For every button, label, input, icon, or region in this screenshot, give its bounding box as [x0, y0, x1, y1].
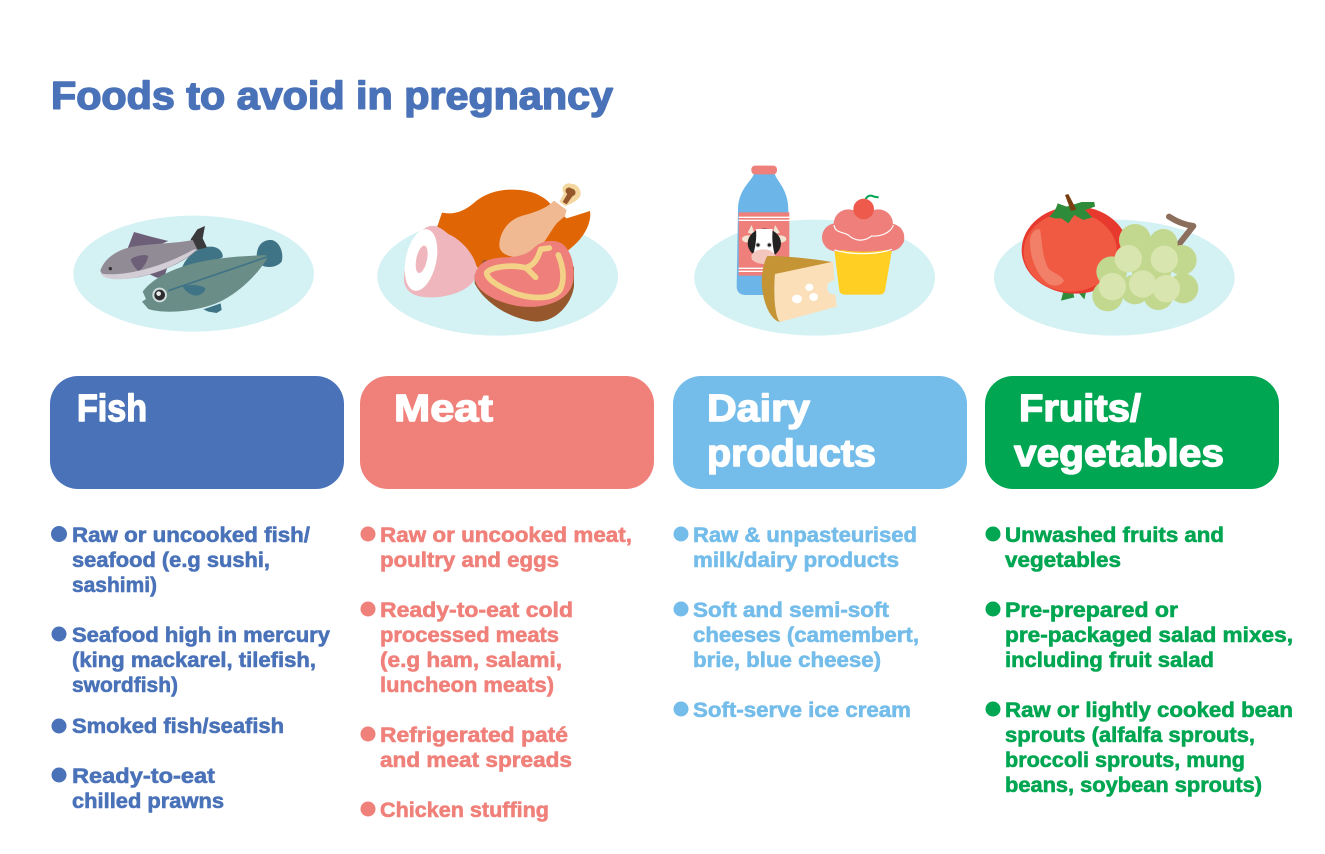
list: fruit and vegetable items: Unwashed fruits and — [1005, 524, 1224, 547]
list: fruit and vegetable items: Pre-prepared or — [1005, 599, 1178, 622]
panel: fish — [50, 216, 344, 813]
list: meat items — [360, 524, 632, 822]
list: dairy items: milk/dairy products — [693, 549, 899, 572]
list: fruit and vegetable items: sprouts (alfalfa sprouts, — [1005, 724, 1255, 747]
list: fish items: swordfish) — [72, 674, 178, 697]
list: meat items: Refrigerated paté — [380, 724, 568, 747]
list: dairy items: cheeses (camembert, — [693, 624, 919, 647]
panel: fruits and vegetables — [985, 194, 1293, 797]
list: fish items: seafood (e.g sushi, — [72, 549, 270, 572]
list: fruit and vegetable items: beans, soybean sprouts) — [1005, 774, 1262, 797]
list: fruit and vegetable items: pre-packaged salad mixes, — [1005, 624, 1293, 647]
list: dairy items: Soft-serve ice cream — [693, 699, 911, 722]
list: meat items: Chicken stuffing — [380, 799, 549, 822]
icon: milk bottle, cupcake and cheese on plate — [694, 166, 935, 336]
list: meat items: (e.g ham, salami, — [380, 649, 562, 672]
list: fish items — [51, 524, 330, 813]
list: fish items: sashimi) — [72, 574, 157, 597]
header: Meat: Meat — [394, 388, 493, 430]
list: fish items: Seafood high in mercury — [72, 624, 330, 647]
panel: meat — [360, 183, 654, 822]
list: fruit and vegetable items: including fruit salad — [1005, 649, 1214, 672]
header: Fish: Fish — [77, 388, 147, 430]
header: Fruits/vegetables: Fruits/ — [1019, 388, 1141, 430]
list: fish items: chilled prawns — [72, 790, 224, 813]
list: fish items: Ready-to-eat — [72, 765, 215, 788]
list: dairy items: Soft and semi-soft — [693, 599, 889, 622]
header: Dairy products: Dairy — [707, 388, 810, 430]
header: Fruits/vegetables: vegetables — [1014, 433, 1224, 475]
header: Dairy products — [673, 376, 967, 489]
icon: fish on plate — [73, 216, 314, 332]
header: Meat — [360, 376, 654, 489]
header: Dairy products: products — [707, 433, 876, 475]
list: fruit and vegetable items — [986, 524, 1293, 797]
list: fruit and vegetable items: vegetables — [1005, 549, 1121, 572]
list: dairy items: Raw & unpasteurised — [693, 524, 917, 547]
list: meat items: processed meats — [380, 624, 559, 647]
list: fruit and vegetable items: broccoli sprouts, mung — [1005, 749, 1245, 772]
list: meat items: and meat spreads — [380, 749, 572, 772]
icon: tomato and grapes on plate — [994, 194, 1235, 336]
list: meat items: Ready-to-eat cold — [380, 599, 573, 622]
header: Fruits/vegetables — [985, 376, 1279, 489]
list: fish items: (king mackarel, tilefish, — [72, 649, 316, 672]
list: fish items: Raw or uncooked fish/ — [72, 524, 310, 547]
list: dairy items: brie, blue cheese) — [693, 649, 881, 672]
icon: ham, chicken and steak on plate — [377, 183, 618, 336]
list: dairy items — [674, 524, 919, 722]
header: Fish — [50, 376, 344, 489]
list: meat items: poultry and eggs — [380, 549, 559, 572]
title: Foods to avoid in pregnancy — [51, 75, 613, 118]
list: meat items: luncheon meats) — [380, 674, 554, 697]
list: meat items: Raw or uncooked meat, — [380, 524, 632, 547]
list: fish items: Smoked fish/seafish — [72, 715, 284, 738]
list: fruit and vegetable items: Raw or lightly cooked bean — [1005, 699, 1293, 722]
panel: dairy products — [673, 166, 967, 722]
